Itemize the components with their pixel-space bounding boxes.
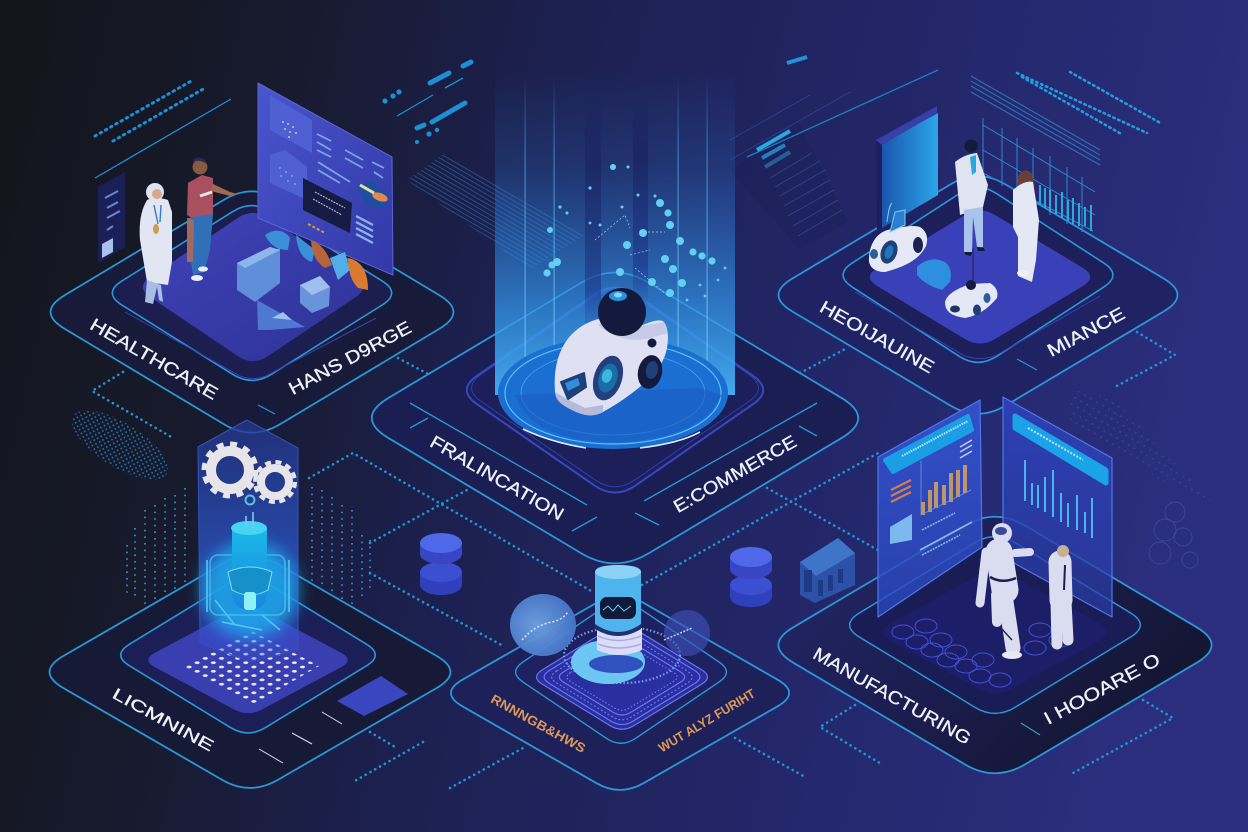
inner ring	[121, 577, 375, 733]
halftone patch	[62, 397, 178, 493]
dot matrix	[181, 630, 319, 705]
decoration rectangle	[337, 676, 408, 716]
equipment: cabinet, box, cloth	[237, 231, 368, 330]
label: e-commerce: E:COMMERCE	[670, 431, 800, 517]
line chart grid	[983, 118, 1095, 232]
left screen	[878, 400, 982, 617]
hatched data field	[407, 153, 585, 270]
dark plate	[883, 570, 1107, 694]
small side panel	[98, 172, 125, 263]
plate	[870, 210, 1090, 344]
label: fraunication: FRALINCATION	[427, 432, 567, 524]
inner ring	[467, 287, 763, 493]
colleague figure	[187, 158, 238, 281]
label: hodare: I HOOARE O	[1041, 649, 1163, 729]
big monitor	[258, 83, 393, 275]
hex floor	[892, 619, 1071, 687]
orange label left: RNNNGB&HWS	[488, 691, 589, 756]
panel: center e-commerce	[372, 70, 858, 563]
pedestal	[571, 565, 645, 684]
bar chart right	[1025, 460, 1092, 538]
panel: top-right	[778, 72, 1178, 414]
dotted connectors	[92, 332, 1175, 788]
astronaut figure	[980, 523, 1030, 659]
holographic beam	[495, 70, 735, 395]
bubble right	[664, 610, 710, 656]
figure: doctor	[955, 140, 988, 256]
inner ring	[516, 601, 726, 743]
indigo plate	[143, 213, 363, 361]
rule lines	[410, 403, 817, 531]
label: manufacturing: MANUFACTURING	[810, 643, 974, 749]
inner ring	[843, 188, 1113, 362]
robot right	[945, 248, 997, 318]
decorative: top left dashes	[95, 62, 471, 178]
scanning disc	[498, 337, 728, 449]
inner ring	[112, 206, 392, 380]
blue display	[876, 106, 938, 230]
panel: bottom center	[451, 565, 789, 790]
decorative dots around tower	[127, 487, 370, 650]
gear tower	[198, 420, 298, 662]
halftone and hex deco	[1070, 390, 1215, 568]
bar chart left	[921, 465, 967, 515]
panel: top-left healthcare	[51, 83, 453, 433]
plate	[148, 607, 348, 713]
dotted lines and data rows	[971, 72, 1162, 165]
label: heoijauine: HEOIJAUINE	[816, 297, 938, 377]
label: miance: MIANCE	[1044, 303, 1128, 361]
machine frame	[207, 555, 289, 630]
circuit rings	[536, 625, 708, 729]
right screen	[1003, 397, 1112, 617]
database icon right	[730, 547, 772, 607]
panel: bottom-right manufacturing	[778, 397, 1212, 773]
blue cushion	[917, 259, 951, 290]
figure: assistant	[1013, 170, 1039, 282]
bubble left	[510, 594, 576, 656]
label: healthcare: HEALTHCARE	[87, 314, 221, 404]
inner ring	[850, 537, 1140, 713]
panel: bottom-left	[50, 420, 450, 788]
orange label right: WUT ALYZ FURIHT	[656, 686, 758, 755]
database icon left	[420, 533, 462, 595]
label: licmnine: LICMNINE	[109, 686, 216, 755]
server racks	[800, 538, 855, 603]
cyan vial	[232, 528, 267, 610]
doctor figure	[140, 183, 172, 304]
ghost document	[730, 57, 938, 250]
gears	[204, 444, 295, 502]
robot left	[869, 203, 927, 272]
data dots	[543, 164, 726, 301]
second figure	[1056, 545, 1069, 644]
robot	[555, 288, 668, 415]
label: hans dorge: HANS D9RGE	[285, 317, 415, 399]
